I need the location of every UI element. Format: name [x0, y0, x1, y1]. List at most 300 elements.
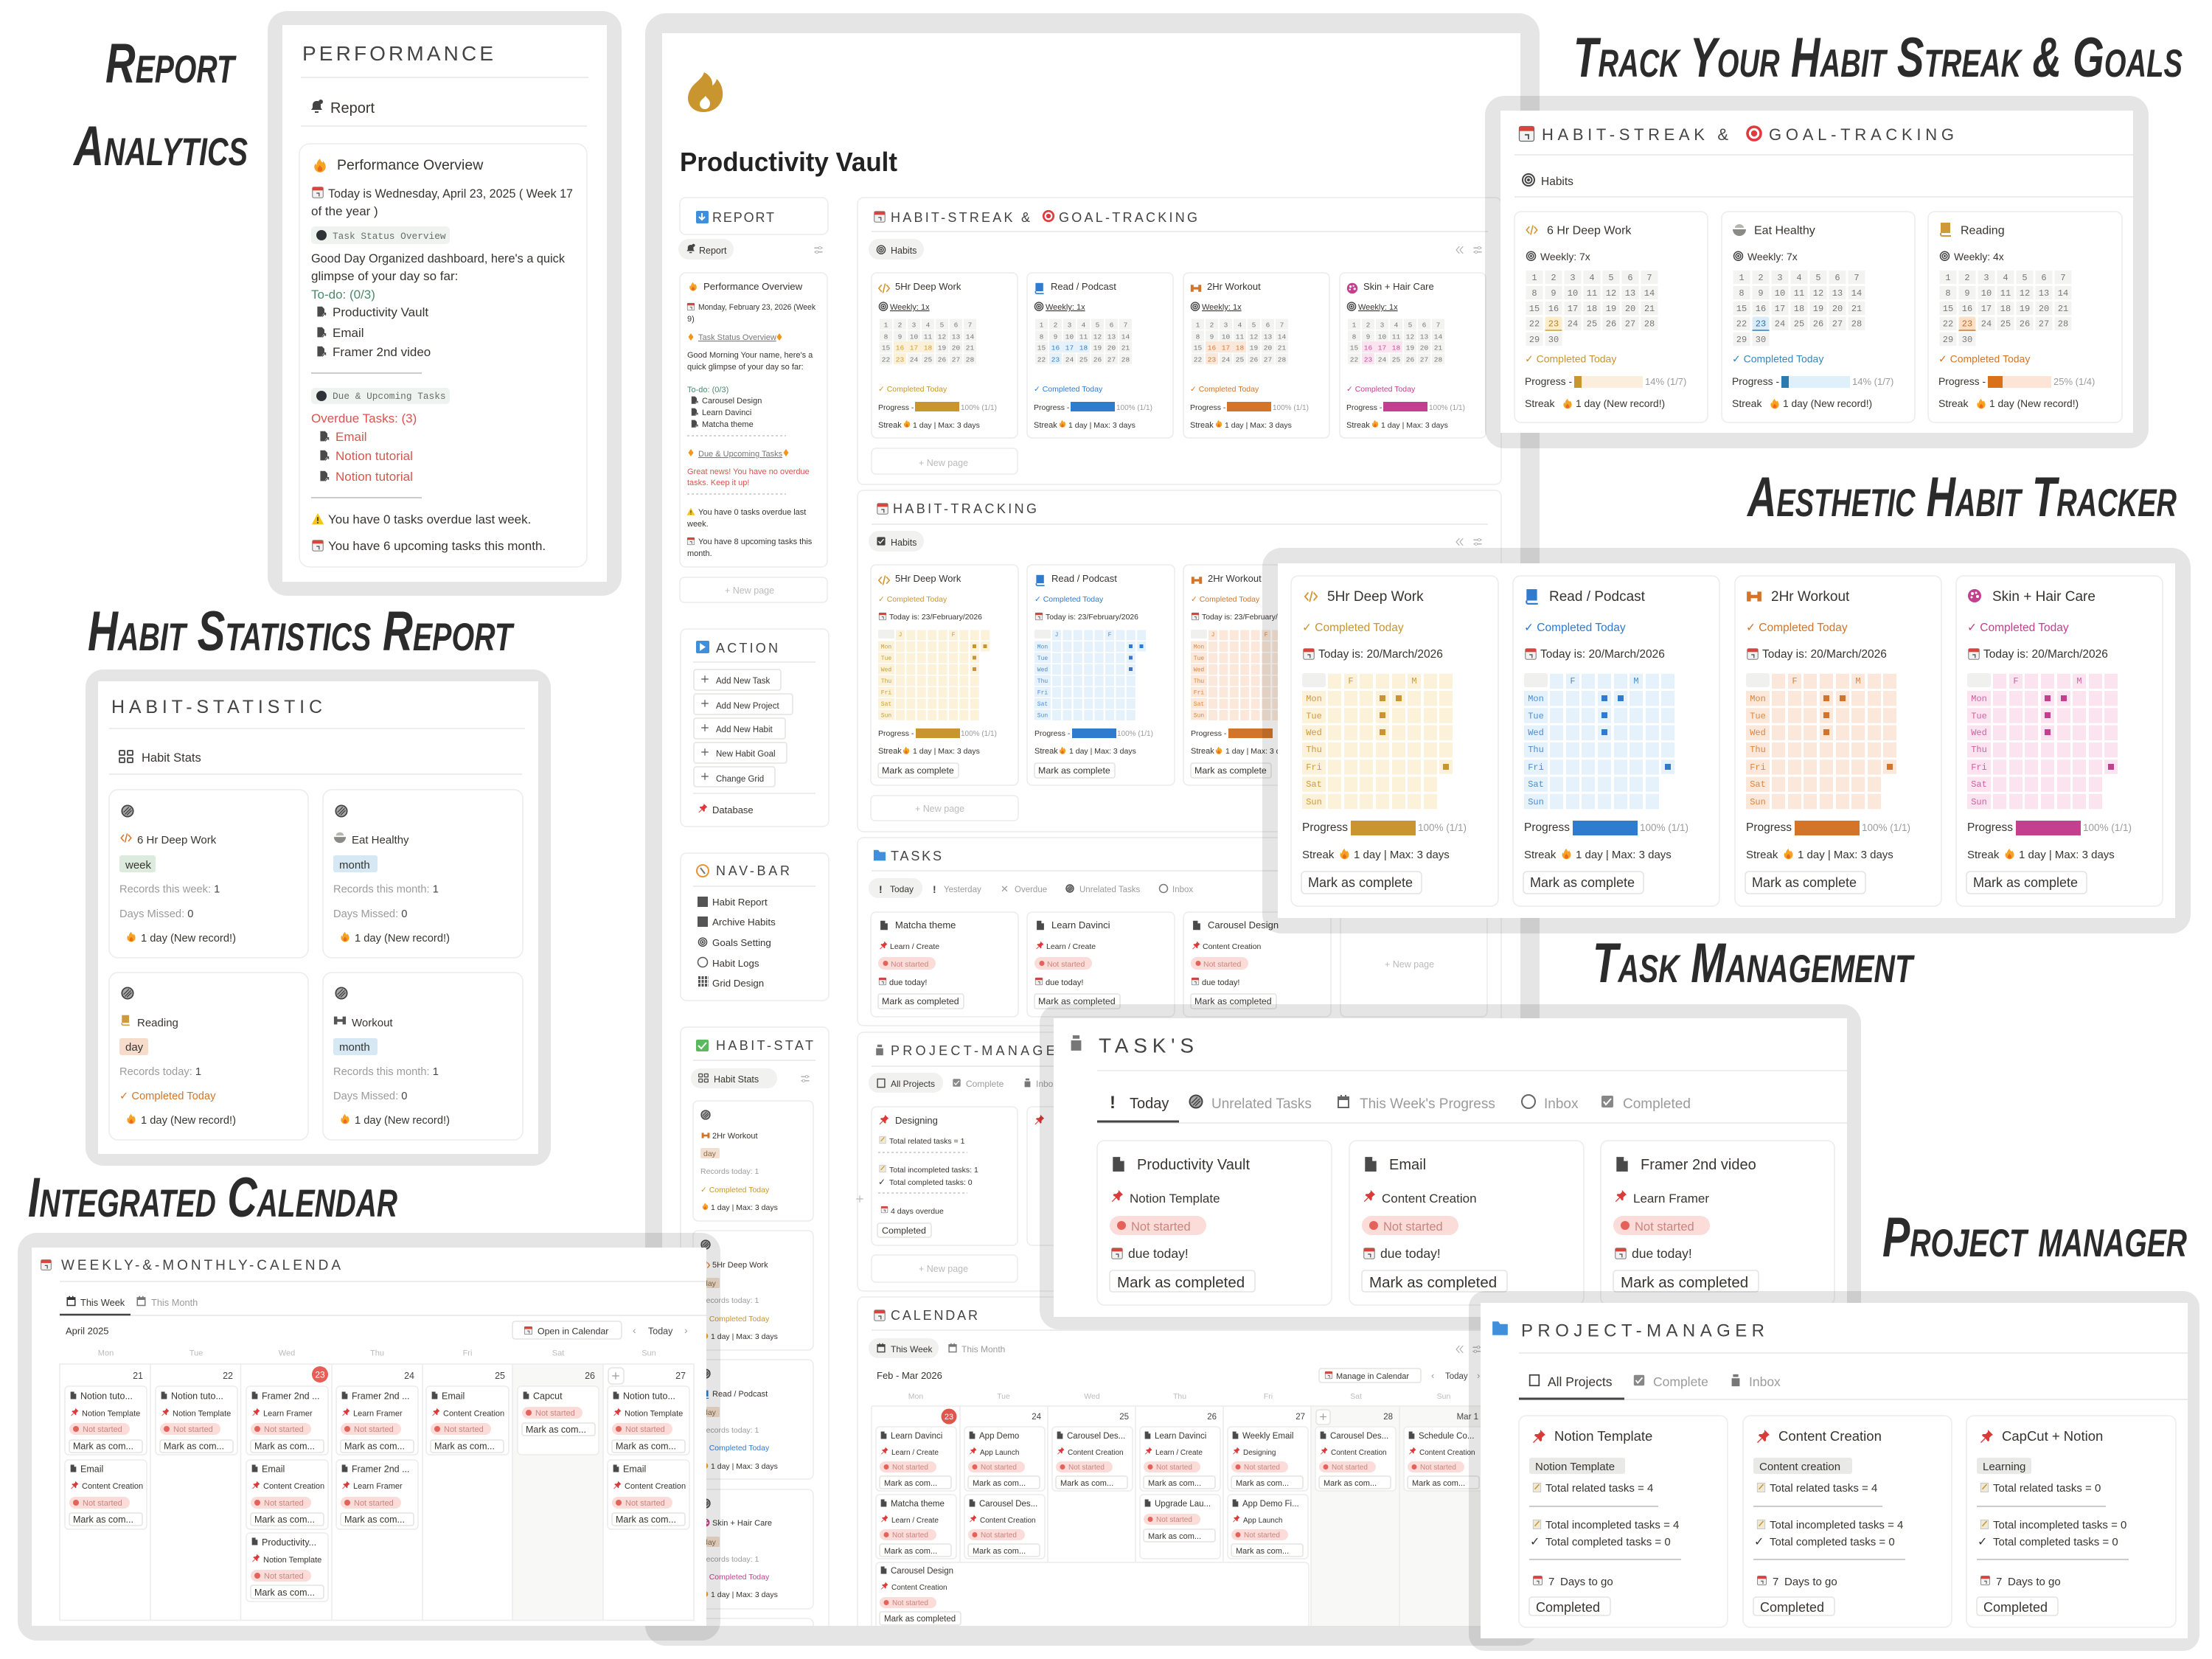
habit card: skin and hair care: 100% (1/1) [1429, 404, 1465, 412]
tracker card: 2hr workout: Mark as complete [1194, 765, 1267, 776]
calendar card: carousel tuesday: Not started [981, 1531, 1017, 1540]
project card: notion template: Total completed tasks = 0 [1545, 1536, 1671, 1548]
heading: habit statistics report: Habit Statistics Report [88, 600, 515, 663]
left column: performance overview card: Learn Davinci [702, 408, 751, 417]
event: notion tutorial tuesday: Not started [173, 1425, 213, 1434]
section: tasks: TASKS [891, 849, 942, 863]
stat card: 6 hr deep work: week [125, 859, 152, 872]
habit card: 2hr workout: 2Hr Workout [1207, 281, 1261, 292]
task tabs: Unrelated Tasks [1211, 1096, 1312, 1112]
habit stat mini card: 5hr deep work: Records today: 1 [700, 1296, 759, 1305]
calendar card: carousel wednesday: Content Creation [1068, 1449, 1124, 1457]
project card: notion template: Total related tasks = 4 [1545, 1482, 1653, 1495]
section: calendar: 27 [1295, 1413, 1305, 1422]
section: habit tracking: Habits [891, 538, 917, 548]
task card: carousel design: Content Creation [1203, 942, 1262, 951]
project card: capcut and notion: Days to go [2008, 1576, 2061, 1588]
tracker card: read podcast: Fri [1037, 690, 1048, 696]
section: calendar: 26 [1207, 1413, 1217, 1422]
calendar card: carousel design wide: Carousel Design [891, 1567, 953, 1576]
event: email monday [65, 1460, 147, 1529]
aesthetic card: skin and hair care pink: Mon [1971, 694, 1987, 704]
calendar card: carousel wednesday: Carousel Des... [1067, 1432, 1125, 1441]
task card: matcha theme: Matcha theme [895, 919, 956, 931]
section: calendar: 24 [1032, 1413, 1042, 1422]
project card: notion template: 7 [1548, 1576, 1554, 1588]
aesthetic card: 2hr workout orange: 2Hr Workout [1771, 589, 1850, 605]
tracker card: 5hr deep work: Fri [881, 690, 891, 696]
tracker card: 2hr workout: Streak [1191, 747, 1214, 756]
streak panel title: HABIT-STREAK & [1542, 125, 1728, 144]
event: notion tutorial monday: Notion tuto... [80, 1391, 133, 1401]
tracker card: read podcast [1027, 565, 1175, 785]
project panel title: PROJECT-MANAGER [1521, 1321, 1764, 1340]
habit stat mini card: 2hr workout: ✓ Completed Today [700, 1186, 770, 1194]
habit statistic title: HABIT-STATISTIC [111, 697, 322, 717]
habit card: 5hr deep work: 100% (1/1) [961, 404, 997, 412]
stat card: reading: day [125, 1041, 144, 1054]
project card: capcut and notion: Completed [1983, 1600, 2048, 1615]
event: email friday: Not started [444, 1425, 484, 1434]
aesthetic card: 2hr workout orange: Wed [1750, 728, 1766, 738]
left column: performance overview card: Great news! You have no overdue [687, 467, 810, 476]
streak card: eat healthy: Eat Healthy [1754, 224, 1815, 237]
event: notion tutorial tuesday: Notion tuto... [171, 1391, 223, 1401]
event: email friday: Email [442, 1391, 465, 1401]
aesthetic card: read podcast blue: F [1570, 676, 1576, 686]
event: notion tutorial sunday: Notion tuto... [623, 1391, 675, 1401]
performance title: PERFORMANCE [302, 42, 493, 65]
streak card: reading: 23 [1962, 319, 1972, 329]
habit card: 5hr deep work: 1 2 3 4 5 6 7 [884, 321, 972, 329]
aesthetic card: read podcast blue [1513, 576, 1719, 906]
event: email monday: Content Creation [82, 1482, 143, 1491]
left column: report block [678, 198, 828, 260]
habit card: skin and hair care: 16 17 18 [1364, 344, 1401, 352]
aesthetic card: 5hr deep work gold: ✓ Completed Today [1302, 622, 1404, 634]
habit stat mini card: read podcast: day [703, 1408, 717, 1417]
calendar card: app demo friday: Not started [1244, 1531, 1280, 1540]
calendar tabs: This Month [151, 1297, 198, 1308]
streak card: 6 hr deep work: 1 2 3 4 5 6 7 [1531, 273, 1652, 283]
aesthetic card: 5hr deep work gold: Tue [1306, 711, 1322, 721]
calendar card: schedule sunday: Mark as com... [1412, 1479, 1465, 1488]
habit card: 2hr workout: 1 2 3 4 5 6 7 [1196, 321, 1284, 329]
tracker card: 2hr workout [1183, 564, 1278, 786]
project tabs: Inbox [1749, 1374, 1781, 1389]
project card: notion template: Completed [1536, 1600, 1600, 1615]
panel: weekly and monthly calendar: 21 [133, 1371, 143, 1381]
left column: report block: REPORT [712, 210, 774, 225]
stat card: 6 hr deep work: Days Missed: 0 [119, 908, 193, 920]
streak card: eat healthy: 22 [1736, 319, 1747, 329]
tracker card: 2hr workout: Sun [1194, 712, 1204, 720]
habit card: 5hr deep work: 23 [896, 355, 905, 364]
project card: designing: Completed [882, 1225, 926, 1236]
habit stat mini card: skin and hair care: ✓ Completed Today [700, 1573, 770, 1582]
habit card: 5hr deep work: 22 [882, 355, 891, 364]
habit card: 5hr deep work: ✓ Completed Today [878, 385, 947, 394]
project card: notion template: Days to go [1560, 1576, 1613, 1588]
aesthetic card: skin and hair care pink: M [2076, 676, 2082, 686]
project card: notion template: Total incompleted tasks = 4 [1545, 1519, 1679, 1531]
streak card: reading: Weekly: 4x [1954, 251, 2004, 262]
tracker card: 5hr deep work: Tue [881, 655, 891, 662]
project card: capcut and notion: CapCut + Notion [2002, 1428, 2103, 1444]
panel: weekly and monthly calendar: 24 [404, 1371, 414, 1381]
aesthetic card: 5hr deep work gold: Thu [1306, 745, 1322, 755]
aesthetic card: 2hr workout orange: Sat [1750, 779, 1766, 790]
habit card: 5hr deep work: 19 20 21 [938, 344, 975, 352]
streak card: 6 hr deep work: 14% (1/7) [1645, 376, 1686, 387]
streak card: reading: ✓ Completed Today [1938, 352, 2030, 364]
habit card: 2hr workout: 16 17 18 [1208, 344, 1245, 352]
panel: habit streak and goal tracking [1485, 96, 2149, 448]
tracker card: 2hr workout: Wed [1194, 667, 1204, 674]
section: calendar: Mar 1 [1457, 1413, 1478, 1422]
streak card: reading: Streak [1938, 397, 1969, 409]
habit card: skin and hair care: 24 25 26 27 28 [1378, 355, 1443, 364]
tracker card: 5hr deep work: Wed [881, 667, 891, 674]
project card: designing: Total completed tasks: 0 [889, 1178, 973, 1187]
section: calendar: 23 [945, 1413, 953, 1422]
habit card: skin and hair care: 22 [1350, 355, 1359, 364]
calendar card: learn davinci thursday: Mark as com... [1148, 1479, 1201, 1488]
left column: nav-bar card: Habit Report [712, 897, 768, 908]
streak card: reading: 29 30 [1943, 335, 1972, 345]
aesthetic card: skin and hair care pink: Streak [1967, 849, 2000, 861]
tracker card: 5hr deep work: 100% (1/1) [961, 730, 997, 738]
event: framer thursday second: Framer 2nd ... [352, 1464, 410, 1475]
aesthetic card: 5hr deep work gold: Fri [1306, 762, 1322, 773]
calendar card: app demo friday: App Demo Fi... [1242, 1500, 1299, 1509]
habit card: read podcast: 1 day | Max: 3 days [1068, 421, 1135, 430]
performance overview card: of the year ) [311, 204, 378, 218]
stat card: reading: ✓ Completed Today [119, 1091, 216, 1102]
left column: action card: Add New Task [716, 677, 771, 686]
calendar tabs [60, 1296, 198, 1315]
habit card: 5hr deep work: Streak [878, 421, 902, 430]
habit card: 2hr workout: 15 [1194, 344, 1203, 352]
tracker card: 5hr deep work: J [899, 632, 902, 639]
left column: habit-stat card [681, 1027, 829, 1648]
calendar card: carousel design wide: Content Creation [891, 1584, 947, 1592]
aesthetic card: 2hr workout orange: Mark as complete [1752, 875, 1857, 890]
project card: notion template: Notion Template [1554, 1428, 1652, 1444]
panel: project manager [1469, 1291, 2199, 1651]
streak card: 6 hr deep work: Streak [1525, 397, 1555, 409]
aesthetic card: read podcast blue: Progress [1524, 821, 1570, 834]
event: notion tutorial monday: Notion Template [82, 1410, 140, 1419]
calendar card: app demo tuesday: App Launch [980, 1449, 1019, 1457]
aesthetic card: 2hr workout orange: Streak [1746, 849, 1778, 861]
tracker card: 2hr workout: Fri [1194, 690, 1204, 696]
left column: action card: Change Grid [716, 775, 764, 784]
section: project manager: + New page [919, 1264, 968, 1274]
task card: productivity vault: Mark as completed [1117, 1274, 1245, 1291]
tracker card: read podcast: Mon [1037, 644, 1048, 650]
streak card: reading: 8 9 [1945, 288, 1970, 299]
project card: content creation: Total related tasks = 4 [1770, 1482, 1877, 1495]
calendar card: learn davinci monday: Learn / Create [891, 1449, 939, 1457]
tracker card: 5hr deep work: ✓ Completed Today [878, 595, 947, 604]
streak card: 6 hr deep work: 1 day (New record!) [1576, 398, 1665, 409]
left column: action card: Add New Habit [716, 726, 773, 734]
project card: content creation: Total completed tasks = 0 [1770, 1536, 1895, 1548]
panel: productivity vault main page [645, 13, 1540, 1651]
event: notion tutorial tuesday [156, 1386, 237, 1455]
calendar card: app demo tuesday: App Demo [979, 1432, 1019, 1441]
project card: content creation: 7 [1773, 1576, 1778, 1588]
left column: action card: Database [712, 804, 754, 815]
aesthetic card: read podcast blue: Sun [1528, 797, 1544, 807]
task card: email [1349, 1141, 1584, 1305]
stat card: eat healthy [323, 790, 523, 958]
new page button [680, 577, 827, 602]
event: framer wednesday: Framer 2nd ... [262, 1391, 320, 1401]
project tabs [1519, 1374, 1781, 1399]
calendar card: weekly email friday: Mark as com... [1236, 1479, 1289, 1488]
project card: designing: Designing [895, 1115, 938, 1126]
tracker card: read podcast: Tue [1037, 655, 1048, 662]
aesthetic card: 5hr deep work gold: Mark as complete [1308, 875, 1413, 890]
tracker card: 2hr workout: F [1265, 632, 1268, 639]
task card: matcha theme [871, 912, 1018, 1017]
habit card: read podcast: Weekly: 1x [1046, 303, 1085, 312]
performance overview card: Productivity Vault [333, 305, 428, 319]
habit card: skin and hair care [1340, 273, 1486, 438]
stat card: eat healthy: Eat Healthy [352, 834, 409, 846]
calendar card: weekly email friday [1228, 1427, 1308, 1491]
task card: productivity vault: due today! [1128, 1246, 1189, 1261]
habit card: 2hr workout [1183, 273, 1329, 438]
event: framer wednesday: Mark as com... [254, 1441, 315, 1451]
event: framer thursday second: Not started [354, 1499, 394, 1508]
task card: learn davinci: Mark as completed [1038, 996, 1116, 1006]
project card: designing: ✓ [878, 1177, 886, 1187]
task card: matcha theme: Mark as completed [882, 996, 959, 1006]
stat card: workout: 1 day (New record!) [355, 1115, 450, 1127]
habit card: 2hr workout: 1 day | Max: 3 days [1225, 421, 1292, 430]
project card: content creation: Content Creation [1778, 1428, 1882, 1444]
habit stat mini card: skin and hair care: Skin + Hair Care [712, 1519, 772, 1528]
section: project manager: Complete [966, 1079, 1004, 1089]
event: notion tutorial sunday [608, 1386, 689, 1455]
report tab [311, 100, 375, 116]
event: framer thursday [336, 1386, 418, 1455]
event: productivity wednesday: Notion Template [263, 1556, 321, 1565]
project card: content creation: Days to go [1784, 1576, 1837, 1588]
habit card: read podcast: 1 2 3 4 5 6 7 [1040, 321, 1127, 329]
aesthetic card: skin and hair care pink: Mark as complete [1973, 875, 2078, 890]
event: email wednesday: Not started [264, 1499, 304, 1508]
section: calendar: This Month [961, 1344, 1005, 1354]
left column: performance overview card: week. [686, 520, 709, 529]
tracker card: read podcast: Sat [1037, 701, 1048, 708]
project tabs: Complete [1653, 1374, 1708, 1389]
calendar card: schedule sunday: Schedule Co... [1419, 1432, 1474, 1441]
stat card: 6 hr deep work: 6 Hr Deep Work [137, 834, 217, 846]
aesthetic card: read podcast blue: Fri [1528, 762, 1544, 773]
task card: learn davinci: Learn Davinci [1051, 919, 1110, 931]
stat card: workout: Workout [352, 1017, 393, 1029]
streak card: eat healthy: 1 day (New record!) [1783, 398, 1872, 409]
aesthetic card: skin and hair care pink: ✓ Completed Today [1967, 622, 2069, 634]
habit card: skin and hair care: 1 2 3 4 5 6 7 [1352, 321, 1440, 329]
aesthetic card: 2hr workout orange: 1 day | Max: 3 days [1798, 849, 1893, 861]
performance overview card: Overdue Tasks: (3) [311, 411, 417, 425]
stat card: reading: Reading [137, 1017, 178, 1029]
performance overview card: Task Status Overview [333, 231, 446, 242]
stat card: workout: Days Missed: 0 [333, 1091, 407, 1102]
task card: framer 2nd video: Learn Framer [1633, 1192, 1709, 1206]
aesthetic card: read podcast blue: Thu [1528, 745, 1544, 755]
calendar card: upgrade launch thursday [1140, 1495, 1220, 1559]
habit stat mini card: skin and hair care [693, 1489, 813, 1609]
aesthetic card: 5hr deep work gold: F [1348, 676, 1354, 686]
section: habit streak and goal tracking: GOAL-TRACKING [1059, 210, 1197, 225]
aesthetic card: read podcast blue: M [1633, 676, 1639, 686]
section: project manager: Inbox [1036, 1079, 1057, 1089]
event: notion tutorial monday: Not started [83, 1425, 122, 1434]
project card: capcut and notion: Total incompleted tasks = 0 [1993, 1519, 2126, 1531]
habit stat mini card: skin and hair care: Records today: 1 [700, 1555, 759, 1564]
calendar card: learn davinci thursday [1140, 1427, 1220, 1491]
panel: weekly and monthly calendar: Today [648, 1326, 673, 1336]
aesthetic card: read podcast blue: Tue [1528, 711, 1544, 721]
aesthetic card: read podcast blue: 1 day | Max: 3 days [1576, 849, 1672, 861]
habit card: 2hr workout: 23 [1208, 355, 1217, 364]
project card: content creation: Completed [1760, 1600, 1824, 1615]
stat card: eat healthy: Days Missed: 0 [333, 908, 407, 920]
habit card: 5hr deep work: 5Hr Deep Work [895, 281, 961, 292]
left column: performance overview card: Performance Overview [703, 281, 803, 292]
aesthetic card: 5hr deep work gold: Sun [1306, 797, 1322, 807]
heading: report analytics: Analytics [73, 115, 248, 178]
streak card: eat healthy: 29 30 [1736, 335, 1766, 345]
heading: integrated calendar: Integrated Calendar [28, 1166, 397, 1229]
performance overview card: Due & Upcoming Tasks [333, 391, 446, 402]
streak panel title: GOAL-TRACKING [1769, 125, 1954, 144]
habit card: 5hr deep work: 24 25 26 27 28 [910, 355, 975, 364]
project card: content creation: ✓ [1754, 1536, 1764, 1548]
performance overview card: Good Day Organized dashboard, here's a quick [311, 251, 565, 265]
calendar card: app demo tuesday: Not started [981, 1464, 1017, 1472]
heading: report analytics: Report [105, 32, 237, 95]
stat card: reading: Records today: 1 [119, 1066, 201, 1078]
panel: habit statistic [86, 669, 551, 1166]
streak card: reading [1928, 212, 2122, 422]
streak card: 6 hr deep work: 15 16 17 18 19 20 21 [1529, 304, 1655, 314]
habit stat mini card: 2hr workout [693, 1101, 813, 1221]
section: calendar: Tue [997, 1392, 1010, 1401]
aesthetic card: 2hr workout orange: Fri [1750, 762, 1766, 773]
habit card: 2hr workout: 100% (1/1) [1273, 404, 1309, 412]
habit stat mini card: skin and hair care: 1 day | Max: 3 days [711, 1590, 778, 1599]
tracker card: 2hr workout: 2Hr Workout [1208, 573, 1262, 584]
task card: carousel design: Carousel Design [1208, 919, 1279, 931]
task card: framer 2nd video [1601, 1141, 1834, 1305]
aesthetic card: 5hr deep work gold: Sat [1306, 779, 1322, 790]
task tabs: ! [1110, 1093, 1116, 1113]
panel: weekly and monthly calendar: ‹ [633, 1324, 636, 1336]
habit stat mini card: read podcast: ✓ Completed Today [700, 1444, 770, 1453]
section: project manager [856, 1032, 1054, 1292]
stat card: reading: 1 day (New record!) [141, 1115, 236, 1127]
task card: email: Not started [1383, 1220, 1443, 1234]
habit stats tab: Habit Stats [142, 751, 201, 765]
section: project manager: All Projects [891, 1079, 935, 1089]
streak card: eat healthy: 23 [1756, 319, 1766, 329]
task card: matcha theme: Not started [891, 960, 929, 969]
tracker card: read podcast: J [1055, 632, 1058, 639]
aesthetic card: skin and hair care pink: Thu [1971, 745, 1987, 755]
task card: learn davinci: Not started [1047, 960, 1085, 969]
calendar card: matcha theme monday [876, 1495, 956, 1559]
left column: nav-bar card: Grid Design [712, 978, 764, 989]
panel: weekly and monthly calendar: Sun [641, 1349, 656, 1358]
streak card: 6 hr deep work: ✓ Completed Today [1525, 352, 1616, 364]
task card: carousel design: Not started [1203, 960, 1242, 969]
aesthetic card: skin and hair care pink: Fri [1971, 762, 1987, 773]
event: productivity wednesday: Productivity... [262, 1537, 316, 1548]
section: habit tracking: + New page [915, 804, 964, 814]
event: capcut saturday: Not started [535, 1409, 575, 1418]
project card: content creation: Total incompleted tasks = 4 [1770, 1519, 1903, 1531]
event: email friday: Mark as com... [434, 1441, 495, 1451]
stat card: workout: Records this month: 1 [333, 1066, 439, 1078]
panel: weekly and monthly calendar: Sat [552, 1349, 564, 1358]
habit card: read podcast: 15 [1037, 344, 1046, 352]
left column: performance overview card: You have 0 tasks overdue last [698, 508, 806, 517]
event: framer wednesday [246, 1386, 328, 1455]
open in calendar button: Open in Calendar [538, 1326, 608, 1336]
aesthetic card: read podcast blue: Mon [1528, 694, 1544, 704]
section: tasks: Yesterday [944, 886, 981, 894]
aesthetic card: 5hr deep work gold: Progress [1302, 821, 1348, 834]
task card: framer 2nd video: Not started [1635, 1220, 1694, 1234]
habit stat mini card: read podcast: Records today: 1 [700, 1426, 759, 1435]
project card: content creation: Content creation [1759, 1461, 1840, 1473]
streak card: 6 hr deep work: 6 Hr Deep Work [1547, 224, 1632, 237]
streak card: 6 hr deep work: 10 11 12 13 14 [1568, 288, 1655, 299]
calendar card: weekly email friday: Weekly Email [1242, 1432, 1293, 1441]
event: framer thursday: Mark as com... [344, 1441, 405, 1451]
event: email wednesday: Content Creation [263, 1482, 324, 1491]
calendar panel title: WEEKLY-&-MONTHLY-CALENDA [61, 1258, 341, 1273]
tracker card: 2hr workout: 1 day | Max: 3 days [1225, 747, 1293, 756]
event: notion tutorial sunday: Notion Template [625, 1410, 683, 1419]
project card: capcut and notion: 7 [1996, 1576, 2002, 1588]
calendar card: carousel saturday: Carousel Des... [1330, 1432, 1388, 1441]
habit stat mini card: 5hr deep work: 1 day | Max: 3 days [711, 1332, 778, 1341]
performance overview card: Email [333, 326, 364, 340]
section: tasks [858, 838, 1501, 1026]
section: calendar: This Week [891, 1344, 933, 1354]
streak card: reading: 24 25 26 27 28 [1981, 319, 2068, 329]
calendar card: carousel tuesday: Carousel Des... [979, 1500, 1037, 1509]
tracker card: 5hr deep work: Progress - [878, 729, 914, 738]
aesthetic card: 2hr workout orange: Mon [1750, 694, 1766, 704]
tracker card: read podcast: Wed [1037, 667, 1048, 674]
stat card: workout [323, 973, 523, 1140]
streak card: eat healthy: 24 25 26 27 28 [1775, 319, 1862, 329]
calendar card: learn davinci thursday: Learn Davinci [1155, 1432, 1206, 1441]
left column: performance overview card: month. [687, 549, 712, 558]
aesthetic card: read podcast blue: Streak [1524, 849, 1557, 861]
streak card: reading: 25% (1/4) [2053, 376, 2095, 387]
panel: weekly and monthly calendar: 27 [675, 1371, 686, 1381]
